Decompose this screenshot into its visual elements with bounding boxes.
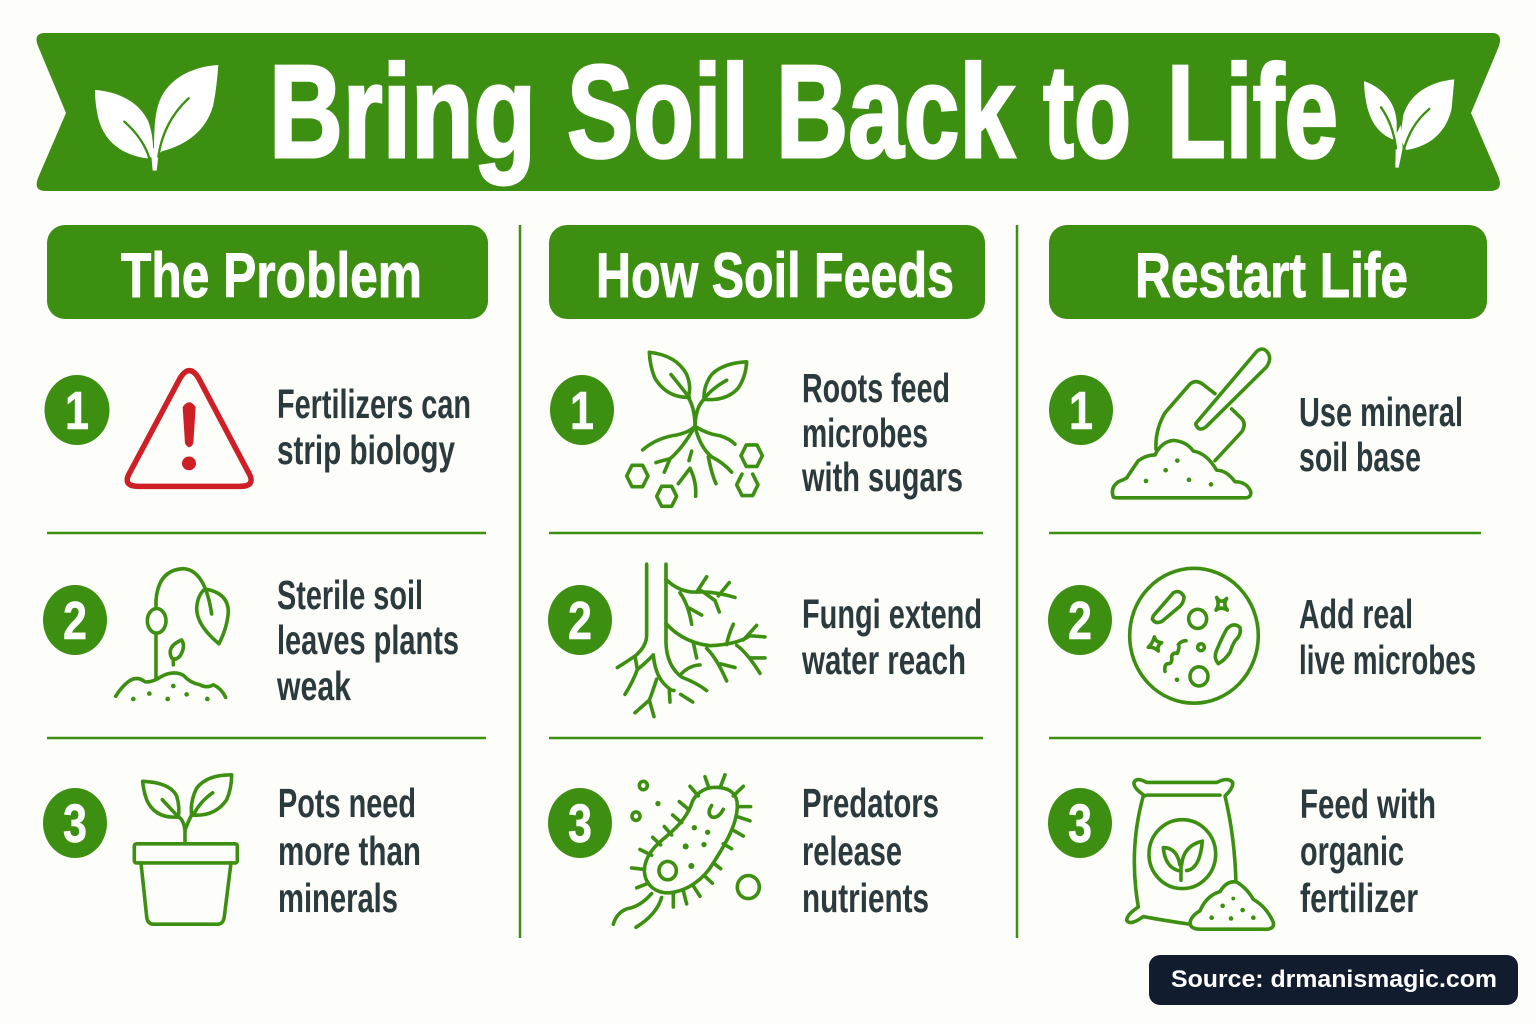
badge 2: 2 — [63, 591, 87, 651]
icon: wilting plant — [116, 569, 228, 701]
text: pots — [278, 780, 421, 921]
text: mineral soil: soil base — [1299, 434, 1421, 480]
text: roots: microbes — [802, 410, 928, 456]
badge 1 — [1049, 375, 1113, 445]
icon: potted seedling — [134, 775, 237, 924]
text: live microbes: Add real — [1299, 591, 1413, 637]
badge 1 — [550, 375, 614, 445]
heading: how soil feeds: How Soil Feeds — [596, 241, 954, 311]
heading: restart life — [1049, 225, 1487, 319]
badge 2 — [548, 585, 612, 655]
icon: petri dish microbes — [1130, 568, 1258, 703]
source badge — [1149, 955, 1518, 1005]
title text: Soil — [567, 38, 749, 185]
badge 3: 3 — [568, 794, 592, 854]
heading: how soil feeds — [549, 225, 985, 319]
panel: the problem — [43, 225, 488, 924]
text: pots: more than — [278, 828, 421, 874]
text: organic fertilizer: Feed with — [1300, 781, 1436, 827]
text: mineral soil: Use mineral — [1299, 389, 1463, 435]
badge 2 — [1048, 585, 1112, 655]
icon: fungal network — [617, 564, 765, 717]
text: roots: with sugars — [801, 454, 963, 500]
title banner — [37, 33, 1500, 191]
title text: Back — [776, 38, 1015, 185]
text: fungi: Fungi extend — [802, 591, 982, 637]
text: sterile soil: Sterile soil — [277, 572, 423, 618]
icon: roots and sugars — [627, 352, 762, 506]
badge 2: 2 — [568, 591, 592, 651]
text: roots — [801, 365, 963, 500]
badge 2 — [43, 585, 107, 655]
text: sterile soil — [276, 572, 459, 709]
badge 2: 2 — [1068, 591, 1092, 651]
badge 1 — [44, 375, 110, 445]
text: predators: nutrients — [802, 875, 929, 921]
text: roots: Roots feed — [802, 365, 950, 411]
text: fungi — [801, 591, 982, 683]
icon: banner leaves right — [1364, 79, 1454, 168]
title text: to — [1043, 38, 1131, 185]
text: fertilizers: strip biology — [277, 427, 455, 473]
badge 1: 1 — [570, 381, 594, 441]
icon: fertilizer bag — [1127, 780, 1274, 929]
badge 1: 1 — [1069, 381, 1093, 441]
text: predators: Predators — [802, 780, 939, 826]
text: pots: Pots need — [278, 780, 416, 826]
panel: restart life — [1048, 225, 1487, 929]
text: organic fertilizer: fertilizer — [1300, 875, 1418, 921]
icon: banner leaves left — [95, 65, 218, 171]
title text: Life — [1167, 38, 1338, 185]
badge 3: 3 — [1068, 794, 1092, 854]
text: organic fertilizer: organic — [1300, 828, 1404, 874]
text: fungi: water reach — [801, 637, 966, 683]
icon: bacterium — [613, 775, 759, 927]
badge 3: 3 — [63, 794, 87, 854]
text: sterile soil: leaves plants — [277, 617, 459, 663]
title text — [269, 38, 1338, 185]
text: fertilizers: Fertilizers can — [277, 381, 471, 427]
text: live microbes — [1299, 591, 1476, 683]
heading: restart life: Restart Life — [1135, 241, 1408, 311]
text: pots: minerals — [278, 875, 398, 921]
badge 3 — [548, 788, 612, 858]
badge 3 — [43, 788, 107, 858]
title text: Bring — [269, 38, 536, 185]
text: organic fertilizer — [1300, 781, 1436, 921]
text: sterile soil: weak — [276, 663, 351, 709]
text: predators — [802, 780, 939, 921]
icon: warning triangle — [127, 371, 251, 486]
icon: shovel and soil — [1112, 349, 1270, 498]
text: mineral soil — [1299, 389, 1463, 480]
panel: how soil feeds — [548, 225, 985, 927]
badge 1: 1 — [65, 381, 89, 441]
text: fertilizers — [277, 381, 471, 473]
heading: the problem — [47, 225, 488, 319]
badge 3 — [1048, 788, 1112, 858]
text: predators: release — [802, 828, 902, 874]
source badge: Source: drmanismagic.com — [1171, 966, 1497, 993]
heading: the problem: The Problem — [121, 241, 422, 311]
